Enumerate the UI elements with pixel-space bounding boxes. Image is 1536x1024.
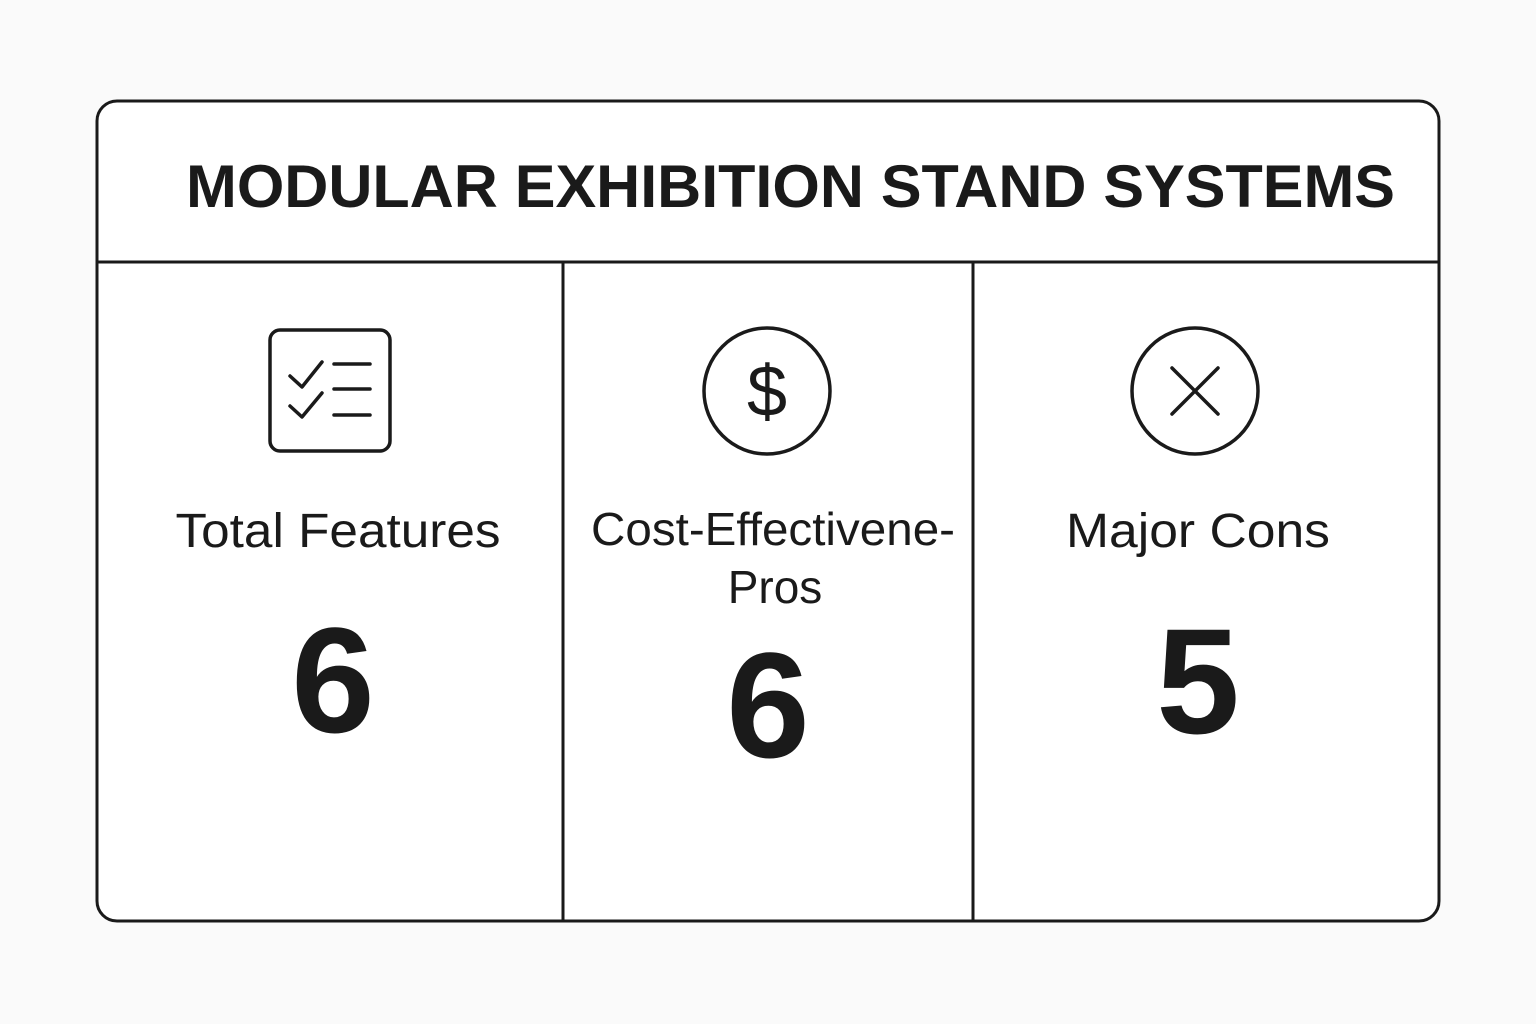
icon: x circle	[1132, 328, 1258, 454]
panel: cost-effectiveness pros	[591, 328, 955, 789]
panel: outer frame	[97, 101, 1439, 921]
label: cost-effectiveness pros: Pros	[728, 561, 822, 613]
label: cost-effectiveness pros: Cost-Effectivene-	[591, 503, 955, 555]
icon: dollar circle: $	[747, 352, 787, 432]
panel: major cons	[1066, 328, 1330, 765]
title: MODULAR EXHIBITION STAND SYSTEMS	[186, 153, 1395, 220]
icon: checklist	[270, 330, 390, 451]
label: cost-effectiveness pros	[591, 503, 955, 613]
label: total features: Total Features	[176, 505, 500, 558]
label: major cons: Major Cons	[1066, 505, 1330, 558]
icon: dollar circle	[704, 328, 830, 454]
number: 5: 5	[1156, 597, 1240, 765]
panel: total features	[176, 330, 500, 764]
number: 6: 6	[726, 621, 810, 789]
number: 6: 6	[291, 596, 375, 764]
